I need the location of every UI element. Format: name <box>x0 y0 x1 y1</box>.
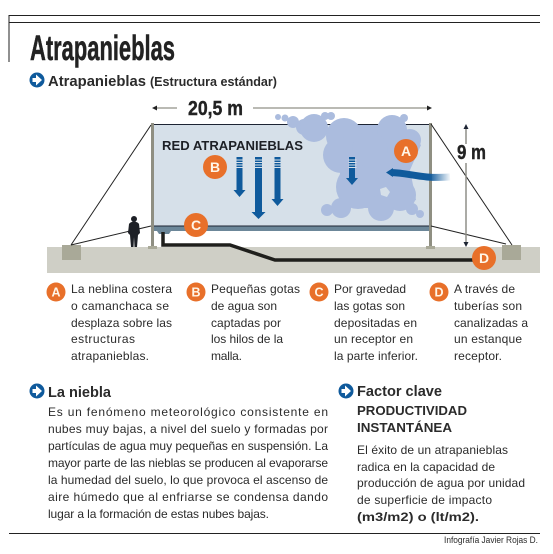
text A: o camanchaca se <box>71 299 169 313</box>
gap in cloud <box>380 187 390 197</box>
body text: El éxito de un atrapanieblas <box>357 443 508 457</box>
text B: malla. <box>211 349 242 363</box>
badge D: D <box>434 286 444 300</box>
icon: blue arrow bullet <box>30 384 44 398</box>
subtitle text: (Estructura estándar) <box>150 75 277 89</box>
body text: aire húmedo que al enfriarse se condensa dando <box>48 490 328 504</box>
step B <box>186 282 300 363</box>
marker B <box>203 155 227 179</box>
subheading: PRODUCTIVIDAD <box>357 404 467 418</box>
body text: partículas de agua muy pequeñas en suspensión. La <box>48 439 328 453</box>
step D <box>430 282 528 363</box>
step C <box>310 282 418 363</box>
poles and guy wires <box>71 123 512 249</box>
header rules <box>9 16 540 62</box>
person silhouette <box>128 216 140 247</box>
body text: (m3/m2) o (lt/m2). <box>357 510 479 524</box>
marker A <box>394 139 418 163</box>
heading: Factor clave <box>357 383 442 400</box>
credit: Infografía Javier Rojas D. <box>444 535 538 545</box>
text A: atrapanieblas. <box>71 349 149 363</box>
text D: tuberías son <box>454 299 522 313</box>
text C: depositadas en <box>334 316 417 330</box>
marker B: B <box>210 159 220 175</box>
body text: nubes muy bajas, a nivel del suelo y formadas por <box>48 422 328 436</box>
title: Atrapanieblas <box>30 29 175 68</box>
text A: estructuras <box>71 332 135 346</box>
anchor blocks <box>62 245 521 260</box>
ground <box>47 247 540 273</box>
text D: receptor. <box>454 349 502 363</box>
marker D <box>472 246 496 270</box>
wind arrow <box>386 168 450 177</box>
width dimension: 20,5 m <box>188 98 243 120</box>
text B: captadas por <box>211 316 281 330</box>
body text: mayor parte de las nieblas se producen al evaporarse <box>48 456 328 470</box>
heading: La niebla <box>48 384 112 401</box>
width dimension <box>152 98 432 120</box>
text A: desplaza sobre las <box>71 316 172 330</box>
bottom rule <box>9 532 540 534</box>
marker A: A <box>401 143 411 159</box>
body text: la humedad del suelo, lo que provoca el ascenso de <box>48 473 328 487</box>
body text: de superficie de impacto <box>357 493 492 507</box>
text D: A través de <box>454 282 515 296</box>
marker C: C <box>191 217 201 233</box>
pipe <box>163 232 484 260</box>
subheading: INSTANTÁNEA <box>357 420 452 435</box>
text C: Por gravedad <box>334 282 406 296</box>
body text: Es un fenómeno meteorológico consistente en <box>48 405 328 419</box>
text B: los hilos de la <box>211 332 283 346</box>
net label: RED ATRAPANIEBLAS <box>162 139 303 153</box>
subtitle text: Atrapanieblas <box>48 73 146 90</box>
text B: de agua son <box>211 299 277 313</box>
badge C: C <box>314 286 324 300</box>
badge A: A <box>51 286 61 300</box>
text A: La neblina costera <box>71 282 172 296</box>
body text: radica en la capacidad de <box>357 460 495 474</box>
section: Factor clave <box>338 383 525 524</box>
icon: blue arrow bullet <box>338 384 354 398</box>
text D: un estanque <box>454 332 522 346</box>
diagram: fog net structure <box>47 98 540 273</box>
subtitle <box>30 72 277 90</box>
height dimension <box>457 124 486 247</box>
water drop arrows <box>234 157 358 219</box>
marker D: D <box>479 250 489 266</box>
text D: canalizadas a <box>454 316 528 330</box>
badge B: B <box>191 286 201 300</box>
body text: producción de agua por unidad <box>357 476 525 490</box>
section: La niebla <box>30 384 328 521</box>
icon: blue arrow bullet <box>30 72 44 88</box>
marker C <box>184 213 208 237</box>
text C: las gotas son <box>334 299 405 313</box>
net panel <box>154 124 430 234</box>
text C: la parte inferior. <box>334 349 418 363</box>
height dimension: 9 m <box>457 142 486 164</box>
text B: Pequeñas gotas <box>211 282 300 296</box>
text C: un receptor en <box>334 332 413 346</box>
cloud of fog <box>275 112 424 221</box>
step A <box>46 282 172 363</box>
body text: lugar a la formación de estas nubes bajas. <box>48 507 269 521</box>
